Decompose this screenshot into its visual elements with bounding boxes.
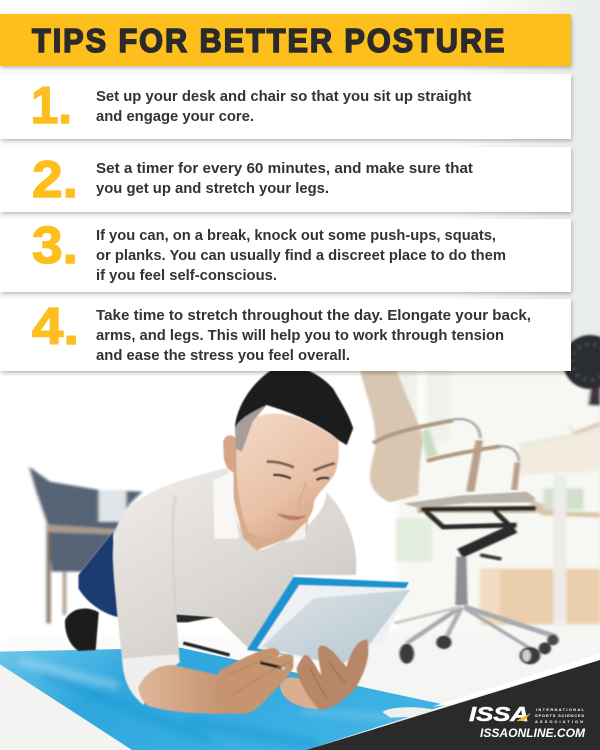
tip 2 text bbox=[96, 160, 473, 197]
logo: gold swoosh bbox=[516, 713, 531, 721]
man: far forearm bbox=[280, 677, 337, 709]
number 3: 3. bbox=[32, 217, 78, 275]
man: trousers and shoe bbox=[65, 532, 216, 651]
number 4: 4. bbox=[32, 298, 79, 356]
corner band bbox=[306, 653, 600, 750]
tip 1 text bbox=[96, 88, 472, 125]
yoga mat bbox=[0, 648, 446, 750]
office chair bbox=[360, 368, 559, 664]
photo scene bbox=[0, 365, 600, 750]
panel: tip 1 bbox=[0, 74, 571, 139]
logo: association name: ASSOCIATION bbox=[535, 719, 583, 724]
panel: tip 4 bbox=[0, 298, 571, 371]
man: collar bbox=[213, 472, 306, 542]
logo: association name bbox=[535, 707, 585, 724]
man: face details bbox=[273, 475, 291, 478]
logo: ISSA bbox=[469, 704, 585, 726]
man: shirt bbox=[113, 468, 356, 705]
tip 2 text: Set a timer for every 60 minutes, and make sure that bbox=[96, 160, 473, 177]
tip 1 text: and engage your core. bbox=[96, 108, 254, 125]
tip 3 text: or planks. You can usually find a discreet place to do them bbox=[96, 247, 506, 264]
tip 4 text bbox=[96, 307, 531, 364]
panel: tip 2 bbox=[0, 147, 571, 212]
number 1: 1. bbox=[31, 77, 72, 135]
logo: association name: INTERNATIONAL bbox=[536, 707, 585, 712]
website url: ISSAONLINE.COM bbox=[480, 726, 586, 740]
tip 4 text: arms, and legs. This will help you to work through tension bbox=[96, 327, 504, 344]
tip 4 text: Take time to stretch throughout the day. Elongate your back, bbox=[96, 307, 531, 324]
notebook bbox=[247, 577, 410, 666]
number 2: 2. bbox=[32, 151, 78, 209]
man: near forearm and hands bbox=[139, 640, 368, 714]
left background chair and table bbox=[29, 467, 142, 623]
background desk and shelf bbox=[396, 368, 600, 635]
title: TIPS FOR BETTER POSTURE bbox=[32, 22, 504, 59]
logo: ISSA: ISSA bbox=[469, 704, 529, 726]
man: neck and head bbox=[223, 365, 353, 550]
floor bbox=[0, 627, 600, 750]
tip 3 text: if you feel self-conscious. bbox=[96, 267, 277, 284]
tip 1 text: Set up your desk and chair so that you sit up straight bbox=[96, 88, 472, 105]
tip 3 text bbox=[96, 227, 506, 284]
panel: tip 3 bbox=[0, 217, 571, 292]
tip 4 text: and ease the stress you feel overall. bbox=[96, 347, 350, 364]
phone on mat bbox=[383, 707, 434, 718]
wall clock bbox=[563, 335, 600, 389]
tip 2 text: you get up and stretch your legs. bbox=[96, 180, 329, 197]
man: hair bbox=[235, 365, 353, 445]
pencil bbox=[183, 643, 230, 655]
title banner bbox=[0, 14, 571, 66]
logo: association name: SPORTS SCIENCES bbox=[535, 713, 584, 718]
tip 3 text: If you can, on a break, knock out some push-ups, squats, bbox=[96, 227, 496, 244]
